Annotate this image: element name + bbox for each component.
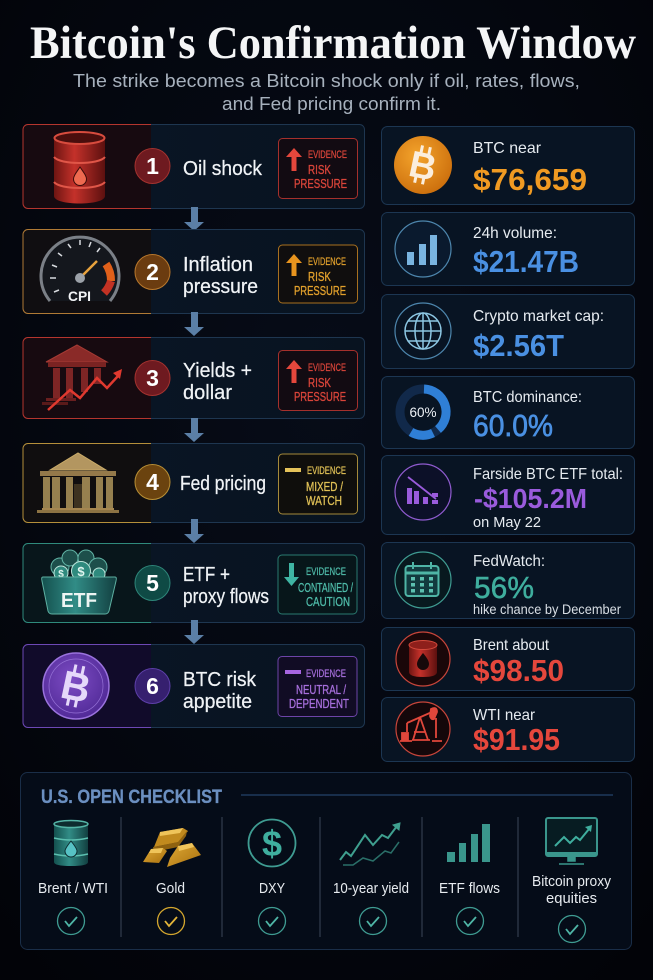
metric text: BTC near [473,140,542,157]
step label: Yields + [183,359,252,382]
icon: calendar [395,552,451,608]
step number 1 [135,148,170,184]
icon: brent barrel [396,632,450,686]
item: Gold: Gold [156,880,185,897]
item: DXY [248,820,296,934]
step number 2 [135,254,170,290]
metric text: Brent about [473,637,550,654]
metric text: -$105.2M [474,483,587,514]
item: Brent / WTI: Brent / WTI [38,880,108,897]
evidence badge: CONTAINED / [298,580,353,595]
subtitle [73,70,580,114]
item: 10-year yield: 10-year yield [333,880,409,897]
metric text [473,637,564,688]
item: Bitcoin proxy equities: Bitcoin proxy [532,873,611,890]
metric text: Crypto market cap: [473,308,604,325]
icon: falling bars [395,464,451,520]
icon: etf basket of coins: $ [58,569,64,580]
panel: BTC dominance [382,376,634,448]
icon: bars [395,221,451,277]
metric text: $98.50 [473,653,564,688]
panel: crypto market cap [382,294,634,368]
icon: donut 60% [400,389,446,435]
checklist heading: U.S. OPEN CHECKLIST [41,787,222,808]
metric text [473,466,623,531]
step label [183,359,252,404]
evidence badge: NEUTRAL / [296,682,346,697]
panel: 24h volume [382,212,634,286]
item: ETF flows [439,824,500,934]
evidence badge: PRESSURE [294,283,346,298]
metric text [473,389,582,443]
metric text [473,225,579,279]
step label [183,668,257,713]
step label [183,563,269,608]
metric text [473,553,621,617]
item: DXY: $ [262,823,282,864]
step number 4: 4 [146,469,159,495]
panel: step 3 yields [23,338,364,418]
evidence badge: EVIDENCE [308,256,346,268]
step label: appetite [183,690,252,713]
panel: BTC price [382,126,634,204]
step label: BTC risk [183,668,257,691]
icon: donut 60%: 60% [410,404,436,420]
evidence badge: RISK [308,375,331,390]
metric text: on May 22 [473,515,541,531]
panel: step 5 etf flows [23,544,364,622]
evidence badge: WATCH [306,493,342,508]
panel: step 1 oil shock [23,124,364,208]
metric text: $76,659 [473,162,587,197]
evidence badge: RISK [308,162,331,177]
step label: pressure [183,275,258,298]
evidence badge: EVIDENCE [306,668,346,680]
step number 6: 6 [146,673,159,699]
item: Bitcoin proxy equities: equities [546,890,597,907]
evidence badge: CAUTION [306,594,350,609]
step number 4 [135,464,170,500]
evidence badge [278,138,358,198]
panel: FedWatch [382,542,634,618]
icon: etf basket of coins [42,550,116,614]
metric text: WTI near [473,707,536,724]
evidence badge: EVIDENCE [308,149,347,161]
step label: ETF + [183,563,230,586]
step label: dollar [183,381,232,404]
icon: federal building [37,453,119,513]
evidence badge: DEPENDENT [289,696,349,711]
evidence badge: EVIDENCE [306,566,346,578]
icon: CPI gauge: CPI [68,288,91,304]
arrow 5 to 6 [184,620,204,644]
panel: Farside ETF [382,456,634,534]
icon: orange bitcoin: B [405,143,440,189]
step label [183,253,258,298]
metric text: Farside BTC ETF total: [473,466,623,483]
step number 3 [135,360,170,396]
panel: WTI [382,698,634,762]
metric text: 60.0% [473,408,553,443]
icon: bank with rising arrow [42,345,122,410]
step label: Inflation [183,253,253,276]
evidence badge [278,350,358,410]
icon: purple bitcoin coin [43,653,109,719]
panel: step 4 fed pricing [23,444,364,522]
panel: step 2 inflation [23,230,364,314]
icon: CPI gauge [41,237,119,304]
step number 5: 5 [146,570,159,596]
step number 6 [135,668,170,704]
icon: purple bitcoin coin: B [57,663,94,712]
title: Bitcoin's Confirmation Window [30,17,636,69]
metric text: $91.95 [473,722,560,757]
icon: etf basket of coins: $ [77,564,85,579]
evidence badge: MIXED / [306,479,343,494]
step label: Oil shock [183,157,263,180]
step label: proxy flows [183,585,269,608]
evidence badge: PRESSURE [294,389,346,404]
item: Bitcoin proxy equities [532,818,611,942]
panel: U.S. open checklist [20,772,632,950]
evidence badge: EVIDENCE [307,465,346,477]
subtitle: and Fed pricing confirm it. [222,93,441,114]
step label: Fed pricing [180,472,266,495]
item: ETF flows: ETF flows [439,880,500,897]
metric text: hike chance by December [473,602,621,617]
step number 2: 2 [146,259,159,285]
icon: globe [395,303,451,359]
arrow 2 to 3 [184,312,204,336]
panel: Brent [382,628,634,690]
metric text [473,140,587,197]
evidence badge [278,555,357,614]
item: DXY: DXY [259,880,285,897]
arrow 4 to 5 [184,519,204,543]
metric text [473,707,560,757]
metric text [473,308,604,363]
metric text: $21.47B [473,244,579,279]
step number 3: 3 [146,365,159,391]
metric text: 24h volume: [473,225,557,242]
panel: step 6 btc risk [23,644,364,728]
metric text: FedWatch: [473,553,545,570]
evidence badge: RISK [308,269,331,284]
item: 10-year yield [333,823,409,934]
item: Brent / WTI [38,820,108,934]
arrow 1 to 2 [184,207,204,231]
metric text: $2.56T [473,328,564,363]
evidence badge [278,245,358,303]
icon: etf basket of coins: ETF [61,590,97,612]
arrow 3 to 4 [184,418,204,442]
evidence badge [278,656,357,716]
item: Gold [143,828,201,934]
icon: orange bitcoin [394,136,452,194]
evidence badge: PRESSURE [294,176,347,191]
evidence badge: EVIDENCE [308,362,346,374]
evidence badge [278,454,358,514]
subtitle: The strike becomes a Bitcoin shock only if oil, rates, flows, [73,70,580,91]
step number 5 [135,566,170,600]
icon: red oil barrel [54,132,105,204]
step number 1: 1 [146,153,159,179]
metric text: BTC dominance: [473,389,582,406]
icon: oil pumpjack [396,702,450,756]
metric text: 56% [474,570,534,605]
